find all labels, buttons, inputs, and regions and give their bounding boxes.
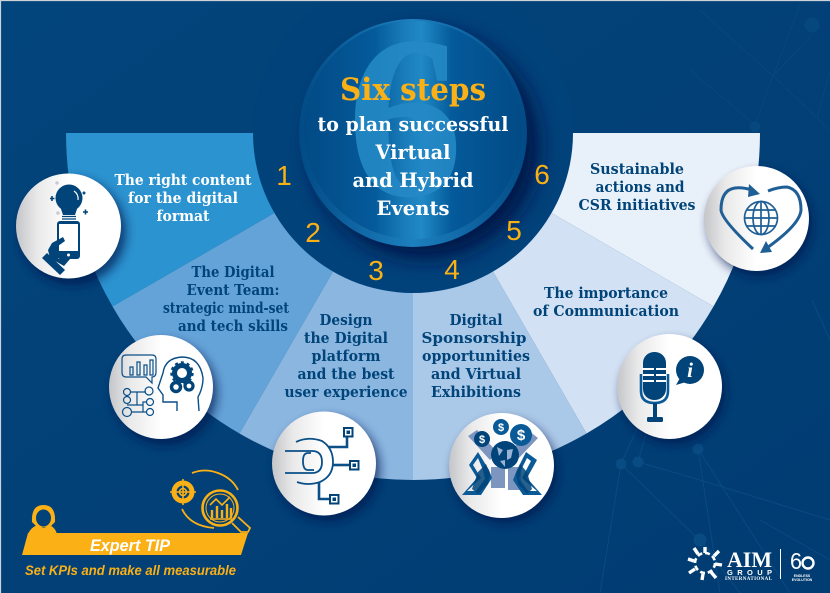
step 5 text: of Communication <box>533 302 679 320</box>
icon: microphone with info bubble: i <box>687 358 693 382</box>
step numbers: 6 <box>534 159 550 190</box>
icon: target and magnifier <box>170 470 250 532</box>
step numbers: 1 <box>276 160 292 191</box>
logo: AIM Group International: GROUP <box>727 568 772 577</box>
segment 3 <box>240 133 413 480</box>
icon: heart arrows and globe <box>704 166 812 276</box>
central circle shadow <box>311 31 539 259</box>
title text: Virtual <box>375 140 451 164</box>
logo: AIM Group International: INTERNATIONAL <box>725 577 773 582</box>
icon: bulb and phone <box>16 174 126 285</box>
icon: hands, globe and coins: $ <box>517 427 526 444</box>
icon: microphone with info bubble <box>617 334 725 444</box>
logo 60 anniversary mark: 6 <box>790 548 802 574</box>
step 2 text: and tech skills <box>178 317 288 335</box>
step numbers: 5 <box>506 215 522 246</box>
segment 1 <box>66 133 413 306</box>
step 3 text: platform <box>312 347 381 365</box>
banner <box>22 533 248 555</box>
step 3 text: user experience <box>284 383 408 401</box>
step 1 text: for the digital <box>128 189 238 207</box>
tip text: Set KPIs and make all measurable <box>25 563 236 578</box>
logo wordmark: AIM <box>727 547 772 572</box>
step 3 text <box>284 311 408 401</box>
step numbers <box>276 159 550 286</box>
step 1 text <box>114 171 252 225</box>
icon: person <box>28 505 57 534</box>
step 2 text: strategic mind-set <box>163 299 289 317</box>
step 6 text <box>578 160 696 214</box>
title text <box>318 72 509 220</box>
segment 6 <box>413 133 760 306</box>
logo mark <box>688 547 722 580</box>
logo 60 anniversary mark <box>790 548 814 582</box>
step 6 text: Sustainable <box>590 160 684 178</box>
step 4 text: Exhibitions <box>431 383 521 401</box>
step 5 text: The importance <box>544 284 668 302</box>
icon: hands, globe and coins <box>449 413 557 523</box>
step 2 text: The Digital <box>192 263 275 281</box>
step 4 text: Sponsorship <box>422 329 526 347</box>
segment 4 <box>413 133 586 480</box>
icon: head with gears <box>109 335 217 445</box>
icon: finger and digital nodes <box>272 412 380 521</box>
step 4 text <box>422 311 530 401</box>
step 4 text: Digital <box>450 311 503 329</box>
title text: and Hybrid <box>352 168 474 192</box>
banner label: Expert TIP <box>90 536 171 555</box>
title text: Six steps <box>340 72 486 108</box>
step numbers: 3 <box>368 255 384 286</box>
title text: Events <box>376 196 450 220</box>
step 4 text: opportunities <box>422 347 530 365</box>
step numbers: 2 <box>305 217 321 248</box>
segment 2 <box>112 133 413 434</box>
logo: AIM Group International <box>688 547 814 582</box>
step 6 text: CSR initiatives <box>578 196 696 214</box>
step numbers: 4 <box>444 254 460 285</box>
step 1 text: format <box>156 207 210 225</box>
background network pattern <box>600 5 830 593</box>
icon: hands, globe and coins: $ <box>498 422 504 434</box>
step 3 text: Design <box>320 311 373 329</box>
step 6 text: actions and <box>596 178 685 196</box>
step 2 text <box>163 263 289 335</box>
semicircle of six step segments <box>66 133 760 480</box>
central title circle <box>299 0 527 247</box>
step 2 text: Event Team: <box>186 281 280 299</box>
segment 5 <box>413 133 714 434</box>
step 3 text: and the best <box>298 365 395 383</box>
inner dark disc <box>253 0 573 293</box>
step 1 text: The right content <box>114 171 252 189</box>
step 5 text <box>533 284 679 320</box>
title text: to plan successful <box>318 112 509 136</box>
expert tip <box>22 470 250 578</box>
step 3 text: the Digital <box>304 329 388 347</box>
icon: hands, globe and coins: $ <box>479 434 485 446</box>
logo 60 anniversary mark: ENDLESS <box>794 574 811 578</box>
logo 60 anniversary mark: EVOLUTION <box>792 578 813 582</box>
step 4 text: and Virtual <box>431 365 521 383</box>
